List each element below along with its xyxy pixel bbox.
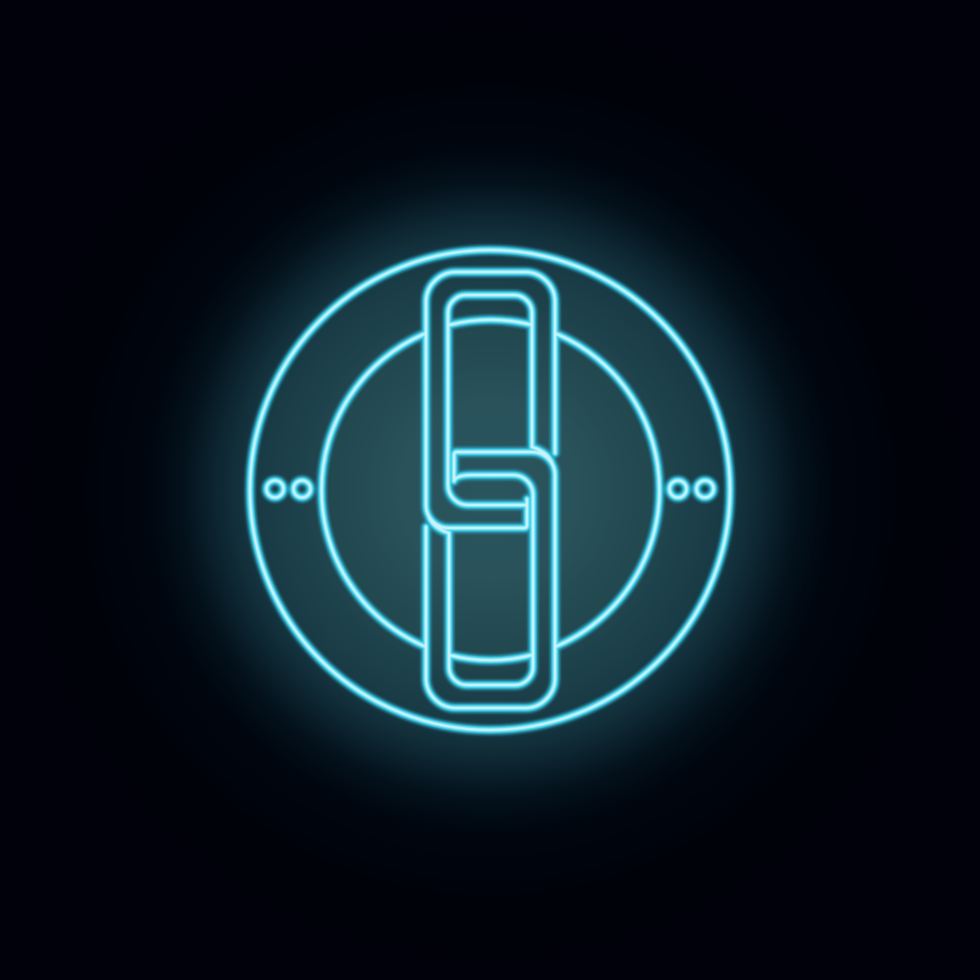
inner circle segments: [322, 320, 659, 660]
neon chain link icon: [250, 250, 730, 730]
neon cyan band of the icon: [250, 250, 730, 730]
neon halo of the icon: [250, 250, 730, 730]
top chain link: [426, 272, 555, 528]
right pair of small rings: [670, 480, 714, 498]
left pair of small rings: [266, 480, 310, 498]
bottom chain link: [426, 452, 555, 708]
outer circle: [250, 250, 730, 730]
